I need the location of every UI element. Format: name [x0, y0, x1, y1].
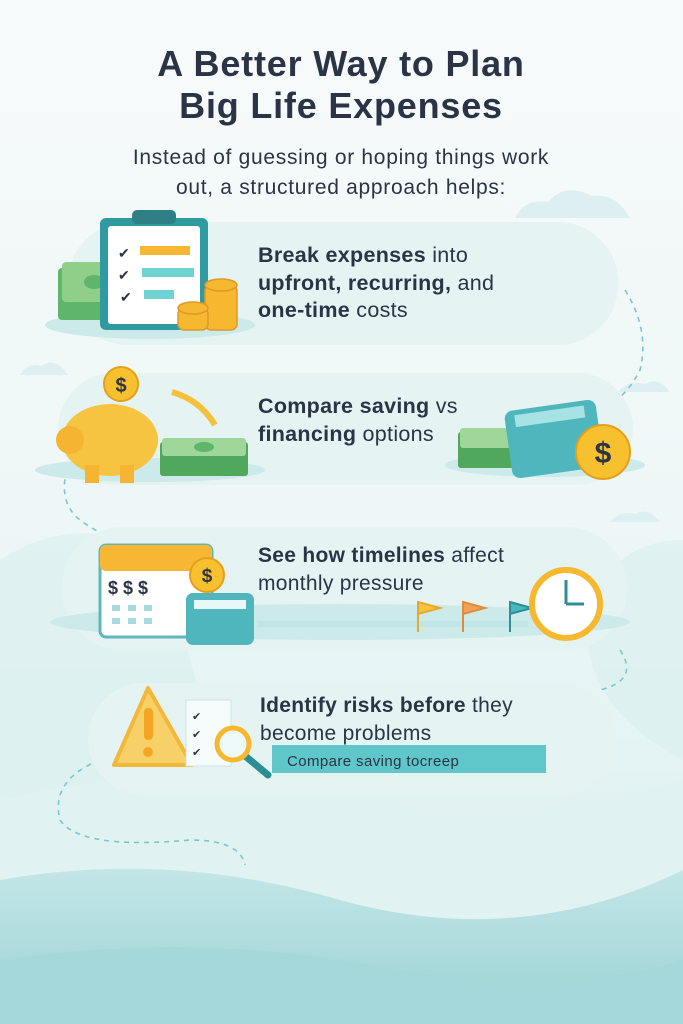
- panel: timelines: monthly pressure: [258, 572, 424, 595]
- icon: calendar: $: [202, 566, 213, 587]
- icon: clipboard: ✔: [118, 267, 130, 283]
- panel: identify risks: become problems: [260, 722, 431, 745]
- panel: break expenses: one-time costs: [258, 298, 408, 322]
- panel: timelines: [50, 527, 630, 650]
- subtitle: Instead of guessing or hoping things work: [133, 146, 549, 169]
- bar: [272, 745, 546, 773]
- icon: clipboard: ✔: [118, 245, 130, 261]
- panel: compare saving vs financing: Compare saving vs: [258, 394, 458, 418]
- title: [157, 43, 525, 126]
- icon: cash and calculator: [458, 399, 630, 479]
- title: A Better Way to Plan: [157, 43, 525, 84]
- bottom hills: [0, 869, 683, 1024]
- icon: checklist: ✔: [192, 747, 201, 759]
- icon: cash and calculator: $: [595, 437, 612, 470]
- icon: checklist: ✔: [192, 729, 201, 741]
- icon: checklist: [186, 700, 231, 766]
- panel: identify risks: Identify risks before they: [260, 694, 513, 717]
- subtitle: out, a structured approach helps:: [176, 176, 506, 199]
- clouds: [20, 190, 670, 522]
- icon: checklist: ✔: [192, 711, 201, 723]
- icon: calendar: [100, 545, 254, 645]
- icon: calendar: $ $ $: [108, 578, 148, 598]
- icon: cash stack: [58, 262, 128, 320]
- icon: arrows: [172, 392, 215, 425]
- icon: clipboard: [100, 210, 208, 330]
- panel: compare saving vs financing: [35, 367, 645, 485]
- icon: piggy bank: [56, 367, 158, 483]
- icon: coins: [178, 279, 237, 330]
- icon: cash: [160, 438, 248, 476]
- icon: piggy bank: $: [115, 375, 127, 397]
- subtitle: [133, 146, 549, 199]
- text: Break expenses into: [258, 243, 468, 267]
- panel: identify risks: [88, 683, 616, 795]
- icon: magnifier: [217, 728, 268, 775]
- panel: break expenses: [45, 210, 618, 345]
- icon: clipboard: ✔: [120, 289, 132, 305]
- icon: warning: [114, 688, 192, 765]
- dashed path: [58, 290, 643, 865]
- panel: timelines: See how timelines affect: [258, 544, 504, 567]
- panel: identify risks: Compare saving tocreep: [287, 753, 459, 770]
- timeline: [258, 570, 600, 638]
- panel: break expenses: upfront, recurring, and: [258, 271, 494, 295]
- title: Big Life Expenses: [179, 85, 503, 126]
- panel: compare saving vs financing: financing options: [258, 422, 434, 446]
- icon: clock: [532, 570, 600, 638]
